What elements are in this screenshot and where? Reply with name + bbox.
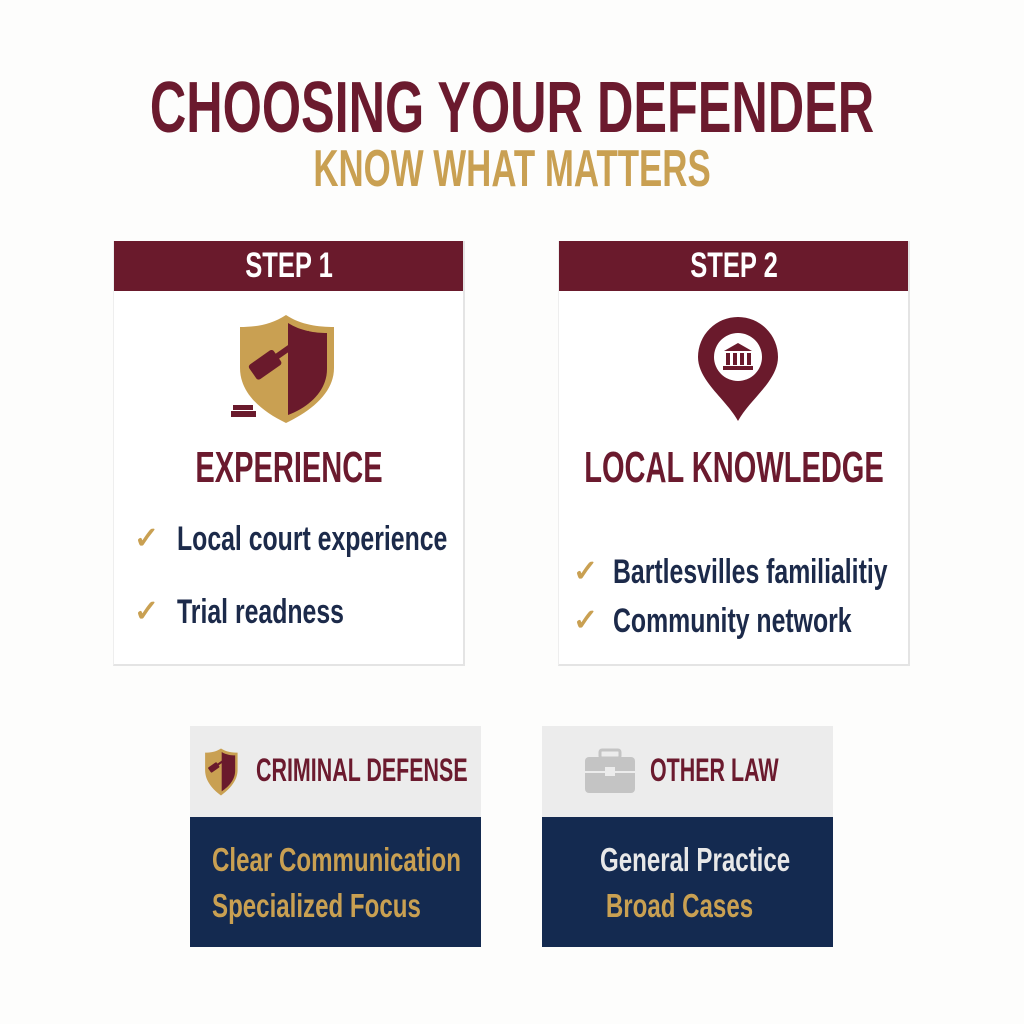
- header: other law: [542, 726, 833, 817]
- step 2 header: STEP 2: [690, 246, 777, 285]
- step 1 header: [114, 241, 463, 291]
- checklist: Trial readness: [177, 593, 344, 631]
- body text: Specialized Focus: [212, 887, 421, 924]
- title: CHOOSING YOUR DEFENDER: [150, 68, 874, 148]
- subtitle: KNOW WHAT MATTERS: [313, 140, 711, 198]
- icon: briefcase: [585, 748, 635, 793]
- checklist: [134, 520, 447, 631]
- step 1 header: STEP 1: [245, 246, 332, 285]
- checklist: Local court experience: [177, 520, 447, 558]
- panel: step 1: [113, 241, 465, 666]
- body text: General Practice: [600, 841, 790, 878]
- header: criminal defense: [190, 726, 481, 817]
- heading: local knowledge: LOCAL KNOWLEDGE: [584, 443, 884, 492]
- icon: shield with gavel: [231, 315, 334, 423]
- header: other law: OTHER LAW: [650, 752, 779, 788]
- checklist: ✓: [134, 522, 159, 555]
- checklist: ✓: [573, 555, 598, 588]
- checklist: ✓: [134, 595, 159, 628]
- body text: [190, 817, 481, 947]
- heading: experience: EXPERIENCE: [195, 443, 383, 492]
- body text: Clear Communication: [212, 841, 461, 878]
- checklist: ✓: [573, 604, 598, 637]
- icon: location pin with courthouse: [698, 317, 778, 421]
- body text: [542, 817, 833, 947]
- header: criminal defense: CRIMINAL DEFENSE: [256, 752, 468, 788]
- checklist: Bartlesvilles familialitiy: [613, 553, 888, 591]
- icon: small shield: [205, 748, 238, 796]
- panel: criminal defense: [190, 726, 481, 947]
- panel: other law: [542, 726, 833, 947]
- checklist: [573, 553, 888, 640]
- checklist: Community network: [613, 602, 852, 640]
- panel: step 2: [558, 241, 910, 666]
- step 2 header: [559, 241, 908, 291]
- body text: Broad Cases: [606, 887, 753, 924]
